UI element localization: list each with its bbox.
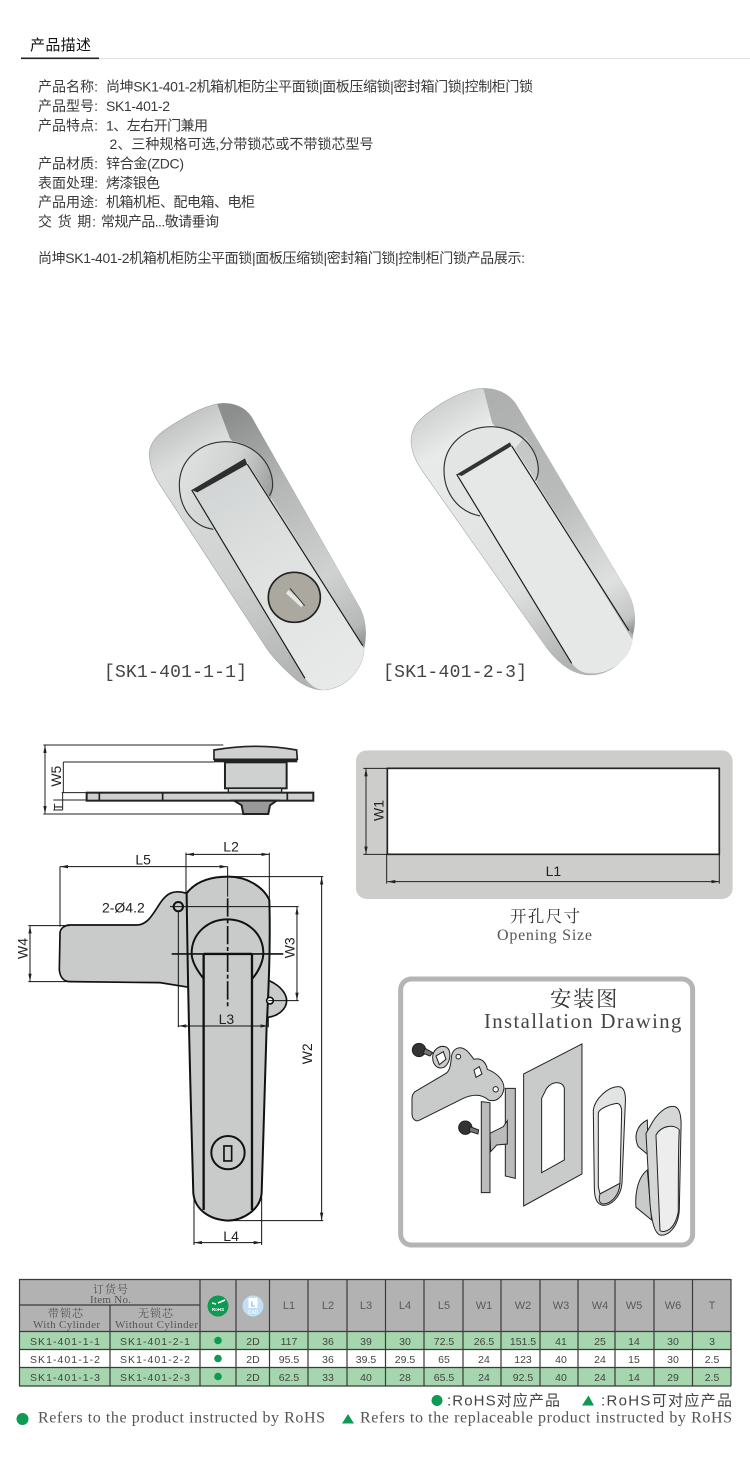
product specification text: 交 货 期:	[38, 214, 96, 230]
table row 3: 33	[322, 1372, 334, 1384]
dimension column headers: W1	[476, 1300, 492, 1312]
product specification text: SK1-401-2	[106, 98, 170, 114]
product specification text: 2、三种规格可选,分带锁芯或不带锁芯型号	[110, 136, 374, 152]
table row 1: 25	[594, 1336, 606, 1348]
table row 2: 15	[628, 1354, 640, 1366]
opening size caption: Opening Size	[497, 927, 592, 944]
table row 3: 40	[555, 1372, 567, 1384]
table row 2	[30, 1354, 719, 1366]
product specification text: 1、左右开门兼用	[106, 118, 208, 134]
product specification text: 产品用途:	[38, 194, 98, 210]
table row 2: SK1-401-1-2	[30, 1354, 100, 1366]
product label: SK1-401-1-1: [SK1-401-1-1]	[104, 663, 247, 683]
dimension labels: L5	[135, 851, 151, 867]
table row 2: SK1-401-2-2	[120, 1354, 190, 1366]
table row 1: 39	[360, 1336, 372, 1348]
table row 3: 62.5	[279, 1372, 299, 1384]
table row 2: 95.5	[279, 1354, 299, 1366]
table row 3: 40	[360, 1372, 372, 1384]
table row 1: 117	[281, 1336, 298, 1348]
table row 3: 24	[594, 1372, 606, 1384]
mounting arm	[59, 892, 189, 987]
RoHS legend: Chinese: :RoHS可对应产品	[601, 1392, 732, 1410]
dimension column headers: L4	[399, 1300, 411, 1312]
ordering table	[19, 1279, 731, 1386]
dimension labels: T	[52, 803, 66, 811]
installation heading: Installation Drawing	[484, 1011, 681, 1033]
opening size caption	[497, 903, 592, 944]
table row 3: 2D	[246, 1372, 260, 1384]
RoHS legend: Chinese	[432, 1392, 732, 1410]
lock cylinder	[268, 572, 320, 622]
dimension labels: W4	[14, 938, 30, 959]
table header cells	[19, 1280, 731, 1332]
table row 2: 24	[478, 1354, 490, 1366]
table row 1: 14	[628, 1336, 640, 1348]
table row 3: 29	[667, 1372, 679, 1384]
mounting plate	[412, 1048, 504, 1121]
product photo: SK1-401-1-1	[149, 403, 366, 690]
table row 2: 24	[594, 1354, 606, 1366]
opening size panel: W1	[370, 800, 386, 821]
dimension labels: L2	[223, 839, 239, 855]
dimension labels: W5	[48, 765, 64, 787]
product specification text: 产品特点:	[38, 118, 98, 134]
table row 1	[30, 1336, 715, 1348]
dimension column headers: L5	[438, 1300, 450, 1312]
table row 1: 30	[667, 1336, 679, 1348]
installation heading: 安装图	[550, 983, 617, 1014]
opening size caption: 开孔尺寸	[510, 903, 580, 927]
table row 3: 14	[628, 1372, 640, 1384]
icon: CAD badge: CAD	[248, 1310, 259, 1316]
RoHS legend: English	[16, 1410, 732, 1426]
item number headers	[33, 1281, 198, 1331]
table row 3: 92.5	[513, 1372, 533, 1384]
dimension labels: 2-Ø4.2	[102, 899, 145, 915]
item number headers: 带锁芯	[48, 1305, 84, 1321]
table row 1: 30	[399, 1336, 411, 1348]
table row 3: 2.5	[705, 1372, 719, 1384]
rail parts	[481, 1088, 515, 1193]
product specification text: 常规产品...敬请垂询	[101, 214, 219, 230]
icon: CAD badge	[242, 1296, 264, 1316]
icon: RoHS badge: RoHS	[212, 1307, 224, 1312]
product specification text: 产品名称:	[38, 78, 98, 94]
table row 1: 36	[322, 1336, 334, 1348]
lock body	[187, 877, 270, 1221]
dimension labels: L3	[219, 1011, 234, 1027]
square washer	[433, 1046, 450, 1068]
dimension labels: W2	[299, 1043, 315, 1064]
dimension column headers: W2	[515, 1300, 531, 1312]
table row 1: SK1-401-1-1	[30, 1336, 100, 1348]
table row 3: 65.5	[434, 1372, 454, 1384]
table row 1: 2D	[246, 1336, 260, 1348]
table grid lines	[19, 1279, 731, 1386]
product specification text: 锌合金(ZDC)	[106, 156, 184, 172]
table row 1: SK1-401-2-1	[120, 1336, 190, 1348]
assembled lock	[636, 1106, 681, 1235]
dimension column headers	[283, 1300, 716, 1312]
dimension column headers: W4	[592, 1300, 608, 1312]
dimension column headers: W5	[626, 1300, 642, 1312]
panel sheet with cutout	[524, 1044, 582, 1206]
table row 2: 2.5	[705, 1354, 719, 1366]
product specification text: 尚坤SK1-401-2机箱机柜防尘平面锁|面板压缩锁|密封箱门锁|控制柜门锁	[106, 78, 533, 94]
installation heading	[484, 983, 681, 1033]
dimension column headers: L3	[360, 1300, 372, 1312]
table row 2: 2D	[246, 1354, 260, 1366]
product specification text: 烤漆银色	[106, 175, 160, 191]
table row 2: 30	[667, 1354, 679, 1366]
icon: RoHS badge	[208, 1296, 228, 1316]
table row 2: 123	[514, 1354, 532, 1366]
table row 2: 36	[322, 1354, 334, 1366]
dimension column headers: L1	[283, 1300, 295, 1312]
item number headers: 无锁芯	[138, 1305, 174, 1321]
table row 1: 72.5	[434, 1336, 454, 1348]
icon: CAD badge: L	[251, 1302, 256, 1308]
item number headers: Without Cylinder	[115, 1319, 198, 1331]
dimension column headers: W3	[553, 1300, 569, 1312]
table row 2: 39.5	[356, 1354, 376, 1366]
table row 1: 3	[709, 1336, 715, 1348]
dimension column headers: L2	[322, 1300, 334, 1312]
item number headers: With Cylinder	[33, 1319, 100, 1331]
dimension column headers: W6	[665, 1300, 681, 1312]
section heading: 产品描述	[30, 37, 91, 54]
key cylinder	[211, 1136, 245, 1169]
installation drawing panel	[401, 979, 693, 1245]
product specification text: 产品材质:	[38, 156, 98, 172]
product specification text: 表面处理:	[38, 175, 98, 191]
product specification text	[38, 78, 533, 266]
table row 3	[30, 1372, 719, 1384]
opening size panel: L1	[546, 863, 561, 879]
table row 1: 151.5	[510, 1336, 536, 1348]
dimension labels	[48, 765, 66, 811]
technical drawing: side view	[43, 745, 313, 814]
table row 3: 28	[399, 1372, 411, 1384]
dimension column headers: T	[709, 1300, 716, 1312]
RoHS legend: English: Refers to the product instructed by RoHS	[38, 1410, 325, 1426]
screws	[412, 1043, 479, 1134]
table row 3: SK1-401-2-3	[120, 1372, 190, 1384]
dimension labels: W3	[282, 937, 298, 958]
product specification text: 尚坤SK1-401-2机箱机柜防尘平面锁|面板压缩锁|密封箱门锁|控制柜门锁产品展示:	[38, 250, 525, 266]
product photo: SK1-401-2-3	[411, 388, 635, 675]
RoHS legend: Chinese: :RoHS对应产品	[447, 1392, 560, 1410]
technical drawing: front view with dimensions	[14, 839, 323, 1245]
table row 3: SK1-401-1-3	[30, 1372, 100, 1384]
gasket	[593, 1087, 625, 1205]
item number headers: Item No.	[90, 1294, 131, 1306]
table row 2: 65	[438, 1354, 450, 1366]
right ear	[267, 980, 287, 1017]
dimension labels: L4	[223, 1228, 239, 1244]
product specification text: 产品型号:	[38, 98, 98, 114]
table row 1: 26.5	[474, 1336, 494, 1348]
product label: SK1-401-2-3: [SK1-401-2-3]	[383, 663, 527, 683]
product specification text: 机箱机柜、配电箱、电柜	[106, 194, 255, 210]
dimension labels	[14, 839, 315, 1244]
opening size panel	[356, 750, 733, 899]
table row 1: 41	[555, 1336, 567, 1348]
RoHS legend: English: Refers to the replaceable product instructed by RoHS	[360, 1410, 732, 1426]
table row 3: 24	[478, 1372, 490, 1384]
table row 2: 40	[555, 1354, 567, 1366]
handle recess	[192, 919, 263, 978]
table row 2: 29.5	[395, 1354, 415, 1366]
table row backgrounds	[19, 1332, 731, 1386]
item number headers: 订货号	[93, 1281, 128, 1297]
